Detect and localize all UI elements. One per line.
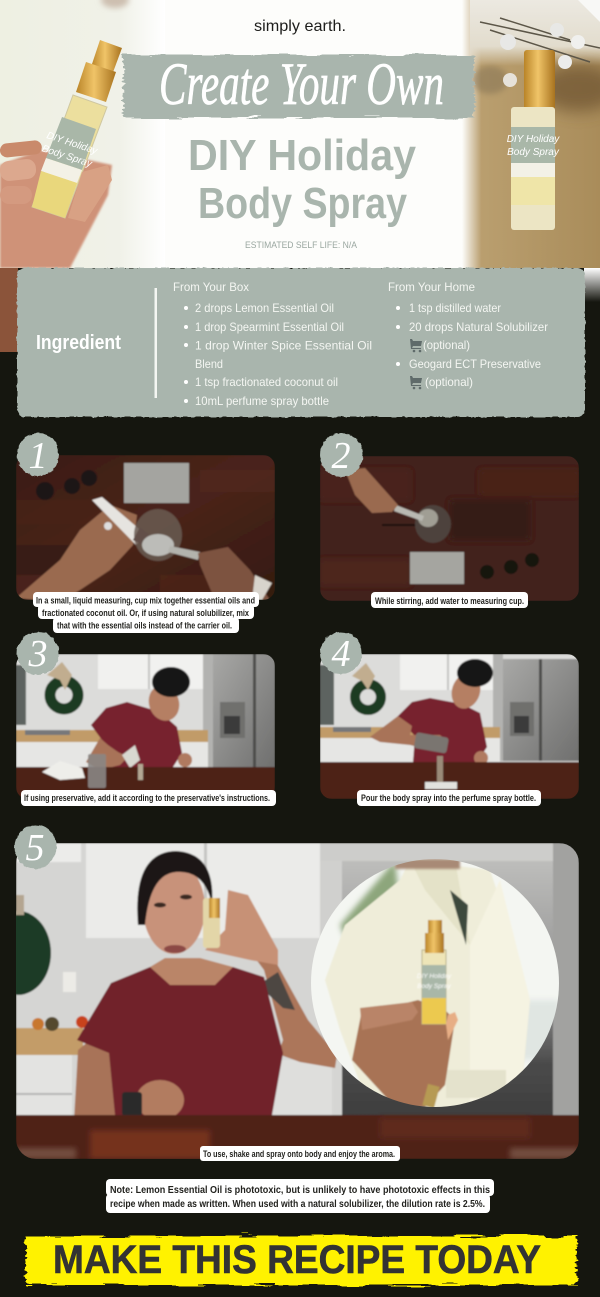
list: from your home: [388, 280, 548, 389]
step 5 photo: [0, 843, 579, 1159]
step 3 badge: [17, 632, 59, 675]
list: from your box: Blend: [195, 357, 223, 371]
note callout: recipe when made as written. When used with a natural solubilizer, the dilution rate is 2.5%.: [110, 1198, 485, 1210]
step 5 caption: [200, 1146, 400, 1161]
list: from your home: Geogard ECT Preservative: [409, 357, 541, 371]
step 5 inset circle photo: Body Spray: [417, 983, 452, 990]
title banner: Create Your Own: [123, 51, 474, 118]
heading: DIY Holiday Body Spray: DIY Holiday: [188, 131, 416, 180]
logo: simply earth: simply earth.: [254, 18, 346, 35]
list: from your box: 1 drop Winter Spice Essential Oil: [195, 338, 372, 352]
step 5 badge: 5: [26, 827, 44, 869]
list: from your box: 2 drops Lemon Essential Oil: [195, 301, 334, 315]
step 4 caption: [357, 790, 541, 806]
step 5 caption: To use, shake and spray onto body and enjoy the aroma.: [203, 1149, 395, 1160]
right bottle: DIY Holiday: [507, 134, 560, 145]
list: from your box: 10mL perfume spray bottle: [195, 394, 329, 408]
step 3 caption: [21, 790, 276, 806]
step 3 badge: 3: [28, 633, 48, 675]
left bottle in hand: Body Spray: [40, 143, 94, 170]
step 3 caption: If using preservative, add it according to the preservative's instructions.: [24, 793, 270, 804]
list: from your home: (optional): [423, 338, 470, 352]
list: from your home: 1 tsp distilled water: [409, 301, 501, 315]
step 1 caption: that with the essential oils instead of the carrier oil.: [57, 620, 232, 632]
step 5 inset circle photo: DIY Holiday: [417, 973, 452, 980]
list: from your box: 1 tsp fractionated coconut oil: [195, 375, 338, 389]
step 1 photo: [16, 455, 275, 602]
left skin behind ingredient panel: [0, 268, 18, 352]
divider: [154, 288, 157, 398]
step 4 caption: Pour the body spray into the perfume spray bottle.: [361, 793, 536, 804]
list: from your home: 20 drops Natural Solubilizer: [409, 320, 548, 334]
step 5 inset circle photo: [310, 859, 560, 1110]
left bottle in hand: [0, 40, 122, 268]
step 2 caption: While stirring, add water to measuring cup.: [375, 596, 524, 607]
list: from your box: [173, 280, 372, 408]
step 1 badge: [17, 433, 59, 477]
right bottle: Body Spray: [507, 147, 560, 158]
shelf life note: ESTIMATED SELF LIFE: N/A: [245, 240, 358, 251]
step 1 caption: [33, 592, 259, 633]
icon: cart: [410, 339, 422, 352]
call to action banner: MAKE THIS RECIPE TODAY: [53, 1238, 541, 1282]
hero photo header: [0, 0, 600, 268]
step 2 badge: [320, 433, 363, 477]
step 4 badge: [320, 632, 362, 675]
list: from your box: From Your Box: [173, 280, 249, 294]
left bottle in hand: DIY Holiday: [45, 130, 99, 157]
panel: ingredients: [17, 268, 585, 417]
step 1 badge: 1: [28, 435, 48, 477]
step 1 caption: In a small, liquid measuring, cup mix together essential oils and: [36, 596, 255, 606]
right white fade beside ingredient panel: [584, 268, 600, 302]
list: from your home: (optional): [425, 375, 473, 389]
title banner: Create Your Own: Create Your Own: [159, 51, 444, 117]
note callout: [106, 1179, 494, 1213]
step 2 badge: 2: [332, 435, 350, 477]
woman: [74, 851, 337, 1120]
note callout: Note: Lemon Essential Oil is phototoxic, but is unlikely to have phototoxic effects in this: [110, 1184, 490, 1196]
heading: DIY Holiday Body Spray: Body Spray: [198, 179, 407, 228]
list: from your box: 1 drop Spearmint Essential Oil: [195, 320, 344, 334]
step 2 caption: [371, 592, 528, 608]
list: from your home: From Your Home: [388, 280, 475, 294]
step 4 photo: [320, 654, 579, 799]
right bottle: [507, 50, 560, 230]
label: Ingredient: Ingredient: [36, 332, 121, 354]
step 3 photo: [16, 654, 275, 799]
step 5 badge: [14, 825, 56, 869]
heading: DIY Holiday Body Spray: [188, 131, 416, 228]
step 2 photo: [320, 456, 579, 601]
step 4 badge: 4: [332, 633, 350, 675]
step 1 caption: fractionated coconut oil. Or, if using natural solubilizer, mix: [42, 608, 250, 619]
icon: cart: [410, 376, 422, 389]
